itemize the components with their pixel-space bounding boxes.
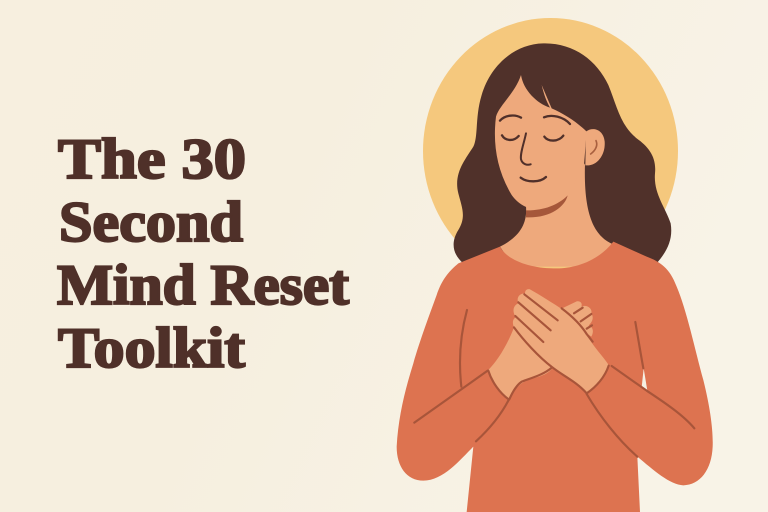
halo: [423, 18, 678, 284]
underarm gap: [642, 368, 647, 391]
title: Mind Reset: [57, 254, 349, 317]
title: Second: [59, 191, 243, 254]
neck: [500, 163, 613, 267]
hand and sleeve lines: [414, 294, 694, 457]
hair: [454, 43, 671, 263]
title: The 30: [58, 128, 246, 191]
shirt: [397, 242, 713, 512]
front hand: [513, 289, 609, 393]
back hand fingertips: [560, 301, 593, 337]
face: [495, 75, 587, 210]
title: Toolkit: [58, 317, 245, 380]
chin shadow: [526, 195, 568, 217]
back hand: [488, 327, 553, 399]
facial features: [500, 116, 597, 181]
figure: woman with hands on heart: [397, 43, 713, 512]
ear: [585, 129, 605, 165]
title: [57, 128, 349, 380]
